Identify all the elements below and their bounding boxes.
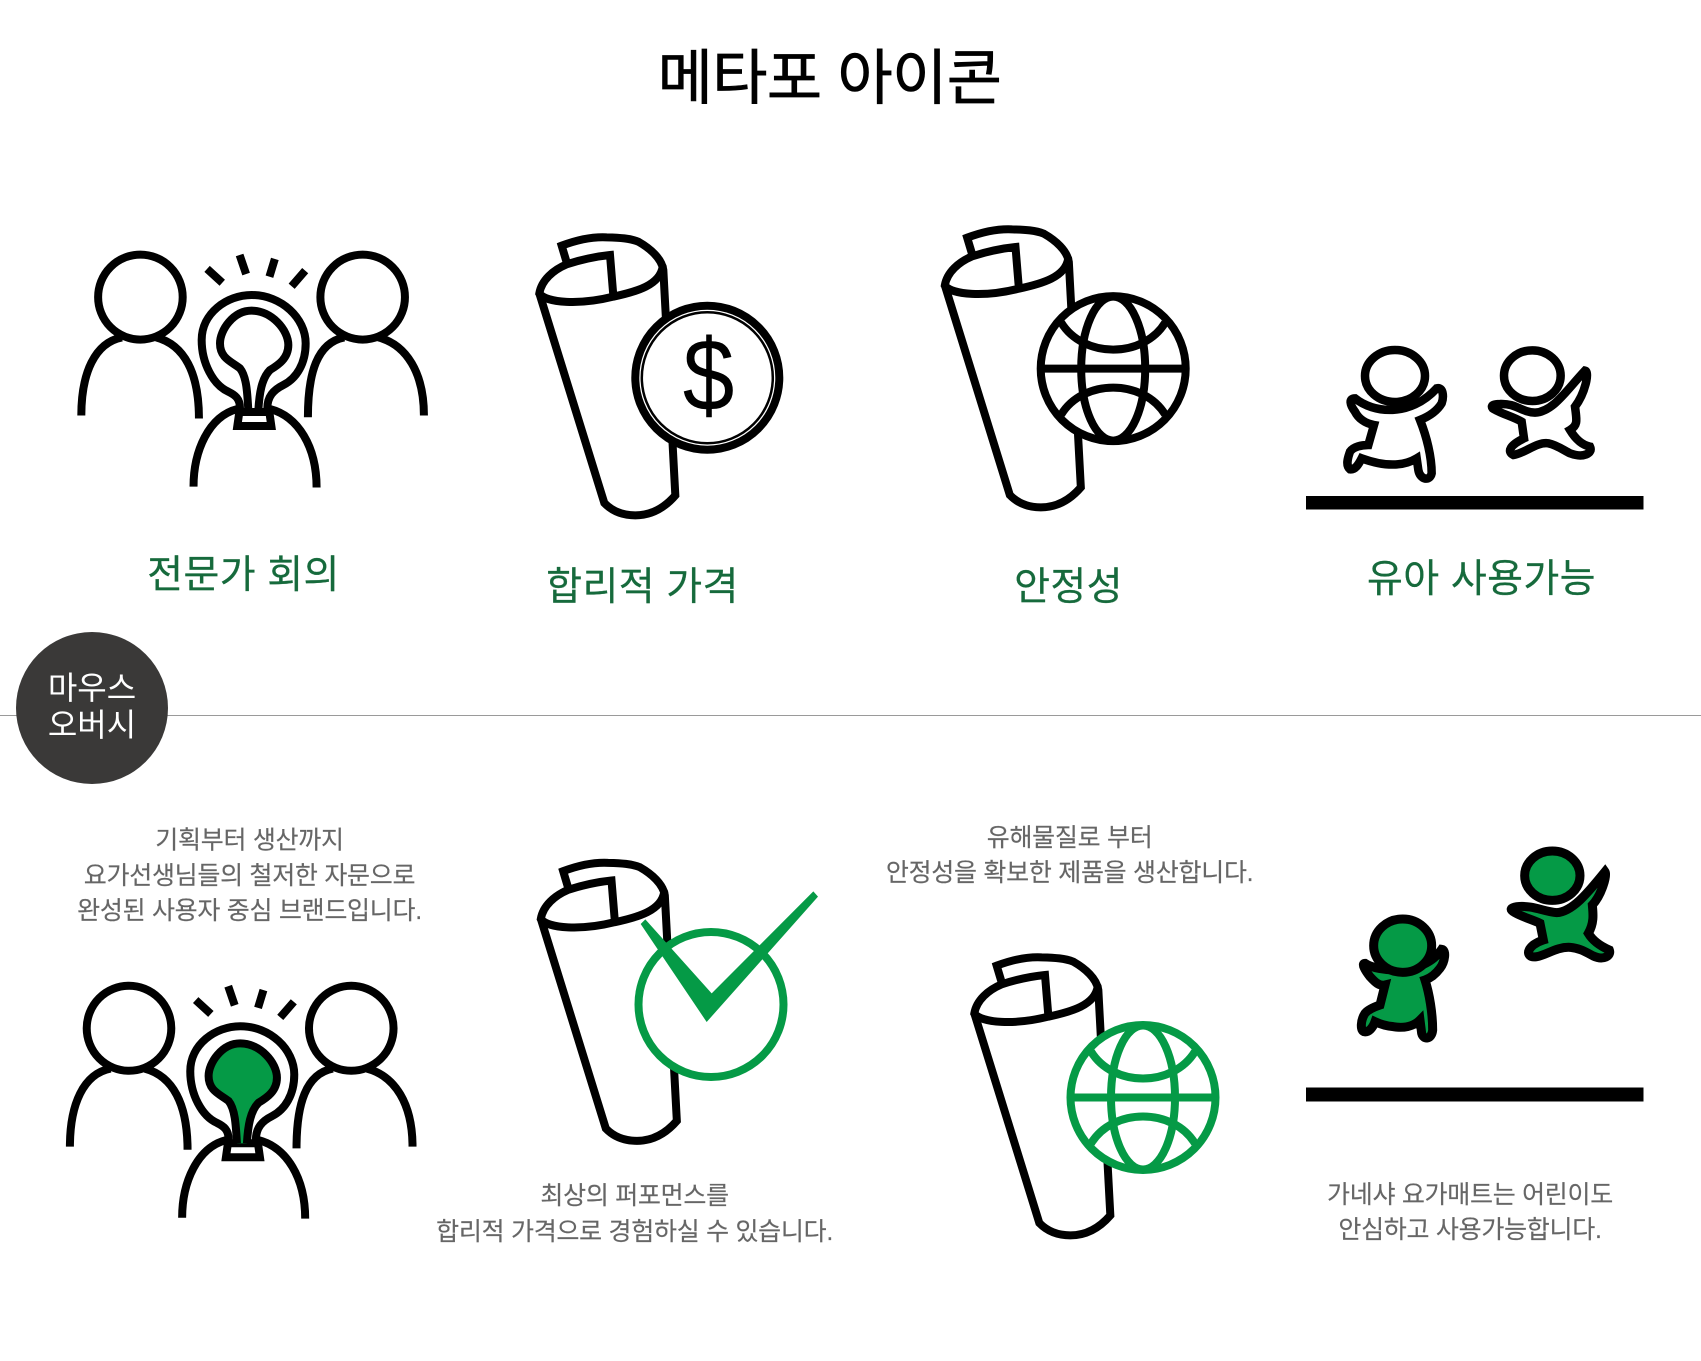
divider — [0, 715, 1701, 716]
text: safe for children — [1327, 1181, 1613, 1244]
text: planning to production — [77, 826, 422, 925]
kid 2 head — [1525, 851, 1580, 900]
icon: scroll with dollar coin: $ — [683, 319, 734, 433]
text: free of harmful substances — [886, 824, 1253, 887]
icon: scroll with check — [541, 863, 818, 1141]
icon: experts meeting hover — [70, 986, 413, 1219]
kid 1 body — [1361, 949, 1445, 1038]
icon: experts meeting — [81, 255, 424, 487]
badge: mouse over: 오버시 — [48, 707, 136, 743]
title: 메타포 아이콘 — [658, 45, 1001, 112]
text: planning to production: 기획부터 생산까지 — [155, 826, 344, 854]
text: free of harmful substances: 안정성을 확보한 제품을 생산합니다. — [886, 859, 1253, 887]
text: planning to production: 완성된 사용자 중심 브랜드입니다. — [77, 897, 422, 925]
icon: children jumping hover — [1306, 851, 1644, 1102]
text: safe for children: 안심하고 사용가능합니다. — [1338, 1216, 1602, 1244]
text: safe for children: 가네샤 요가매트는 어린이도 — [1327, 1181, 1613, 1209]
text: best performance: 합리적 가격으로 경험하실 수 있습니다. — [436, 1218, 833, 1246]
icon: scroll with green globe — [974, 957, 1216, 1235]
kid 1 head — [1374, 919, 1432, 972]
text: planning to production: 요가선생님들의 철저한 자문으로 — [84, 862, 415, 890]
label: stability: 안정성 — [1014, 566, 1123, 609]
text: best performance — [436, 1182, 833, 1246]
icon: scroll with globe — [945, 229, 1186, 507]
badge: mouse over — [16, 632, 168, 784]
label: usable by toddlers: 유아 사용가능 — [1367, 558, 1596, 601]
label: reasonable price: 합리적 가격 — [546, 566, 739, 609]
text: free of harmful substances: 유해물질로 부터 — [987, 824, 1152, 852]
icon: scroll with dollar coin — [539, 237, 779, 515]
kid 2 body — [1511, 872, 1610, 958]
text: best performance: 최상의 퍼포먼스를 — [540, 1182, 729, 1210]
badge: mouse over: 마우스 — [48, 670, 136, 706]
icon: children playing — [1306, 350, 1644, 510]
label: experts meeting: 전문가 회의 — [147, 554, 340, 597]
